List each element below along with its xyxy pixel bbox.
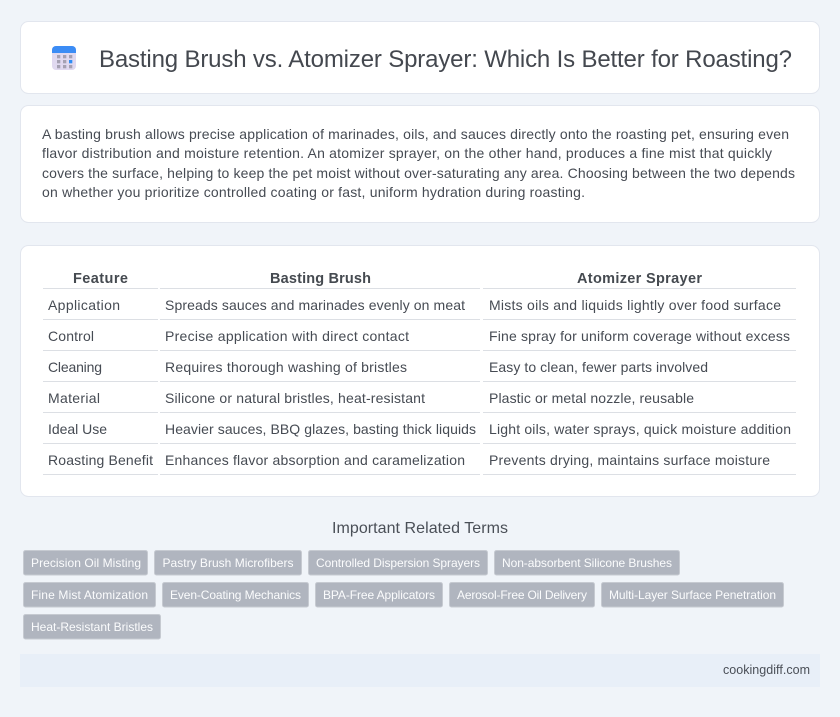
row: application: Application <box>48 297 120 313</box>
tag: Precision Oil Misting <box>31 556 141 570</box>
tag: Pastry Brush Microfibers <box>162 556 294 570</box>
row: application <box>48 297 781 313</box>
table header row: Basting Brush <box>270 271 371 287</box>
tag <box>24 614 160 639</box>
row: roasting benefit <box>48 452 770 468</box>
tag <box>450 582 594 607</box>
row: cleaning: Requires thorough washing of bristles <box>165 359 407 375</box>
tag: Even-Coating Mechanics <box>170 588 301 602</box>
row: application: Spreads sauces and marinades evenly on meat <box>165 297 465 313</box>
footer bar: cookingdiff.com <box>723 663 810 677</box>
panel: intro paragraph <box>20 106 820 222</box>
row: material <box>48 390 694 406</box>
tag <box>24 550 148 575</box>
row: roasting benefit: Enhances flavor absorption and caramelization <box>165 452 465 468</box>
header panel <box>20 22 820 94</box>
row: cleaning: Easy to clean, fewer parts involved <box>489 359 708 375</box>
row: material: Plastic or metal nozzle, reusable <box>489 390 694 406</box>
tag <box>308 550 488 575</box>
table header row: Atomizer Sprayer <box>577 271 702 287</box>
tag: Aerosol-Free Oil Delivery <box>457 588 587 602</box>
row: roasting benefit: Roasting Benefit <box>48 452 153 468</box>
row: ideal use: Heavier sauces, BBQ glazes, basting thick liquids <box>165 421 476 437</box>
row: application: Mists oils and liquids lightly over food surface <box>489 297 781 313</box>
tag <box>602 582 784 607</box>
tag <box>162 582 308 607</box>
table header row: Feature <box>73 271 128 287</box>
row: control: Fine spray for uniform coverage without excess <box>489 328 790 344</box>
table header row <box>73 271 702 287</box>
tag: Heat-Resistant Bristles <box>31 620 153 634</box>
row: material: Material <box>48 390 100 406</box>
panel: intro paragraph: on whether you prioritize controlled coating or fast, uniform hydration during roasting. <box>42 184 585 200</box>
row: control: Control <box>48 328 94 344</box>
tag <box>154 550 302 575</box>
tag: Multi-Layer Surface Penetration <box>609 588 776 602</box>
tag: Non-absorbent Silicone Brushes <box>502 556 672 570</box>
panel: comparison table <box>20 246 820 496</box>
tag: Controlled Dispersion Sprayers <box>316 556 480 570</box>
row: ideal use <box>48 421 791 437</box>
icon: calendar grid <box>52 46 76 70</box>
title: Basting Brush vs. Atomizer Sprayer: Which Is Better for Roasting? <box>99 46 792 73</box>
row: material: Silicone or natural bristles, heat-resistant <box>165 390 425 406</box>
panel: intro paragraph: flavor distribution and moisture retention. An atomizer sprayer, on the other hand, produces a fine mist that quickly <box>42 145 772 161</box>
row: control <box>48 328 790 344</box>
tag <box>494 550 680 575</box>
row: cleaning <box>48 359 708 375</box>
related term tags <box>24 550 784 639</box>
tag: Fine Mist Atomization <box>31 588 148 602</box>
footer bar <box>20 654 820 687</box>
tag <box>24 582 156 607</box>
tag: BPA-Free Applicators <box>323 588 435 602</box>
panel: intro paragraph: covers the surface, helping to keep the pet moist without over-saturating any area. Choosing between the two depends <box>42 165 795 181</box>
row: ideal use: Light oils, water sprays, quick moisture addition <box>489 421 791 437</box>
panel: intro paragraph: A basting brush allows precise application of marinades, oils, and sauces directly onto the roasting pet, ensuring even <box>42 126 789 142</box>
row: cleaning: Cleaning <box>48 359 102 375</box>
row: ideal use: Ideal Use <box>48 421 107 437</box>
tag <box>316 582 442 607</box>
row: roasting benefit: Prevents drying, maintains surface moisture <box>489 452 770 468</box>
row: control: Precise application with direct contact <box>165 328 409 344</box>
heading: related terms: Important Related Terms <box>332 520 508 537</box>
